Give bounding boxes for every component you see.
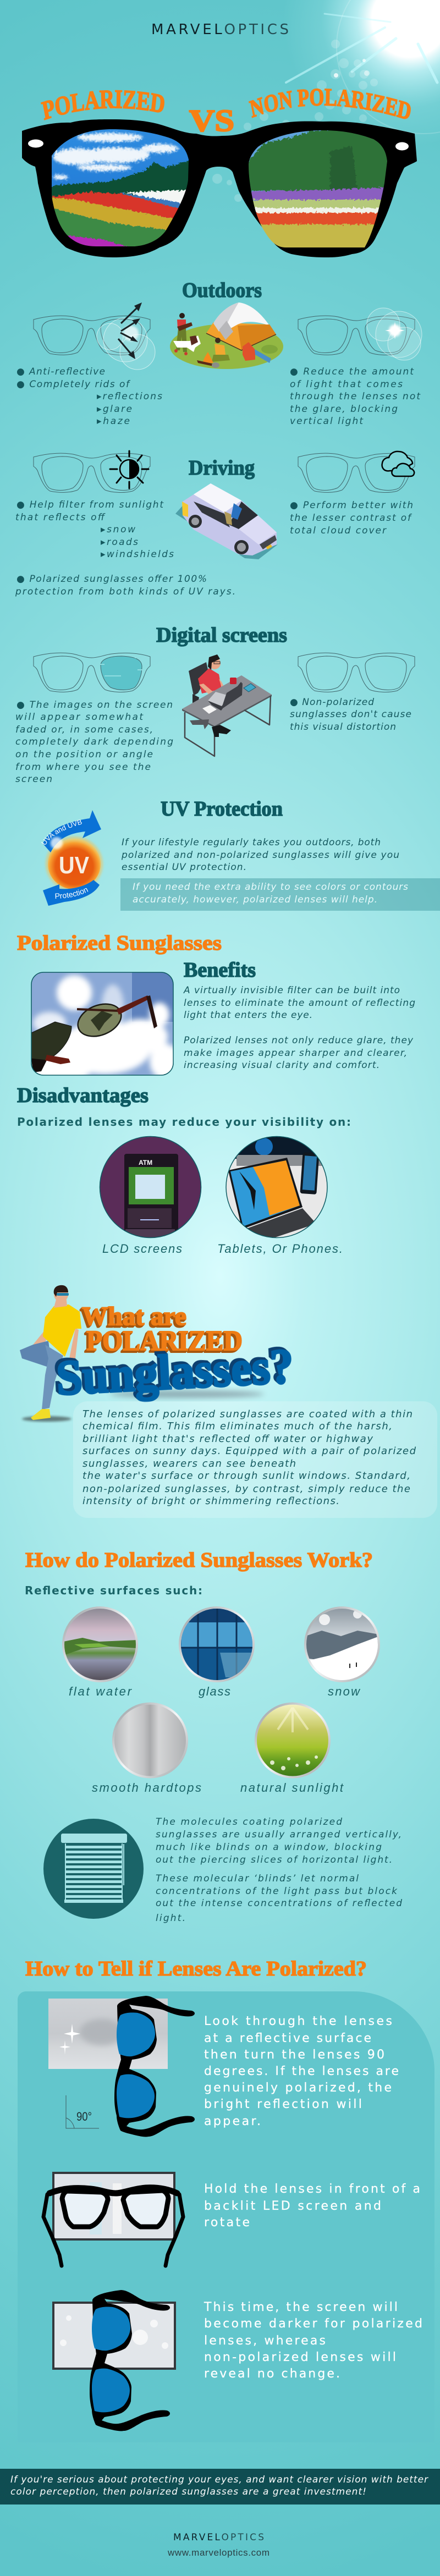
text: non polarized driving	[290, 500, 413, 536]
closing banner: color perception, then polarized sunglasses are a great investment!	[10, 2486, 366, 2497]
text: UV protection note	[15, 574, 235, 597]
icon: window blinds	[43, 1819, 144, 1919]
text: UV protection: If your lifestyle regularly takes you outdoors, both	[122, 837, 381, 848]
photo: ATM LCD screen: ATM	[139, 1159, 152, 1166]
illustration: car	[175, 483, 278, 559]
driving non polarized glasses with cloud icon	[298, 452, 415, 492]
illustration: person at desk	[182, 654, 272, 756]
photo: glass	[179, 1606, 256, 1682]
text: polarized digital screens: on the position or angle	[15, 749, 153, 760]
step 2: backlit screen with glasses	[43, 2173, 183, 2266]
text: UV protection note: protection from both kinds of UV rays.	[15, 586, 235, 597]
step 1: 90 degree icon	[66, 2095, 99, 2128]
seated camper	[212, 338, 230, 362]
heading: Disadvantages: Disadvantages	[17, 1084, 148, 1107]
text: how the molecules work: The molecules coating polarized	[156, 1817, 342, 1828]
step 2: text: Hold the lenses in front of a	[204, 2182, 420, 2196]
text: polarized outdoors: ● Completely rids of	[16, 379, 131, 390]
label: flat water: flat water	[69, 1685, 133, 1698]
title: POLARIZED VS NON POLARIZED: VS	[189, 104, 234, 138]
text: polarized digital screens: completely dark depending	[15, 736, 173, 747]
text: polarized driving: ● Help filter from sunlight	[16, 499, 164, 510]
panel: what are polarized sunglasses text	[73, 1401, 437, 1518]
subheading: reflective surfaces: Reflective surfaces such:	[25, 1584, 202, 1597]
digital polarized glasses with tinted lens	[34, 653, 150, 692]
sun and lens flare	[212, 0, 440, 202]
callout: extra ability: If you need the extra ability to see colors or contours	[133, 882, 408, 893]
panel: what are polarized sunglasses text: brilliant light that's reflected off water or highway	[82, 1433, 373, 1445]
text: polarized outdoors: ● Anti-reflective	[16, 366, 105, 377]
step 3: text: lenses, whereas	[204, 2334, 326, 2348]
text: non polarized outdoors	[290, 366, 421, 427]
panel: what are polarized sunglasses text: surfaces on sunny days. Equipped with a pair of polarized	[82, 1445, 416, 1457]
heading: Outdoors: Outdoors	[182, 279, 262, 302]
text: UV protection	[121, 837, 399, 873]
closing banner: If you're serious about protecting your eyes, and want clearer vision with better	[10, 2474, 428, 2485]
text: how the molecules work: out the intense concentrations of reflected	[156, 1898, 402, 1909]
right lens: non polarized scene	[249, 130, 387, 247]
text: polarized digital screens: will appear somewhat	[15, 712, 144, 723]
heading: Polarized Sunglasses: Polarized Sunglasses	[17, 932, 222, 955]
text: polarized digital screens	[15, 700, 173, 785]
text: how the molecules work: light.	[156, 1913, 185, 1924]
text: polarized digital screens: screen	[15, 774, 52, 785]
step 1: 90 degree icon: 90°	[76, 2110, 92, 2123]
photo: ATM LCD screen	[99, 1136, 204, 1240]
panel: what are polarized sunglasses text: sunglasses, wearers can see beneath	[82, 1458, 296, 1469]
text: UV protection: polarized and non-polarized sunglasses will give you	[121, 850, 399, 861]
panel: what are polarized sunglasses text: chemical film. This film eliminates much of the harsh,	[82, 1421, 392, 1432]
text: how the molecules work: out the piercing slices of horizontal light.	[156, 1854, 392, 1865]
heading: Driving: Driving	[189, 456, 255, 480]
step 3: text: non-polarized lenses will	[204, 2351, 396, 2364]
photo: natural sunlight	[255, 1703, 331, 1779]
step 1: text: bright reflection will	[204, 2098, 362, 2111]
text: polarized outdoors: ▸glare	[97, 404, 132, 415]
label: natural sunlight: natural sunlight	[240, 1781, 344, 1795]
camper with logs	[174, 313, 193, 355]
text: how the molecules work: These molecular ‘blinds’ let normal	[156, 1873, 359, 1884]
step 1: text: at a reflective surface	[204, 2032, 371, 2045]
figure: man in yellow shirt	[20, 1285, 81, 1422]
label: LCD screens: LCD screens	[102, 1242, 182, 1256]
text: how the molecules work: much like blinds on a window, blocking	[156, 1842, 382, 1853]
subheading: visibility: Polarized lenses may reduce your visibility on:	[17, 1115, 351, 1129]
heading: Digital screens: Digital screens	[156, 624, 287, 647]
text: non polarized digital screens: sunglasses don't cause	[290, 709, 411, 720]
left lens: polarized scene	[52, 129, 189, 246]
text: non polarized outdoors: of light that comes	[290, 379, 403, 390]
photo: smooth hardtops	[112, 1703, 188, 1779]
text: non polarized driving: the lesser contrast of	[290, 513, 413, 524]
step 1: text: genuinely polarized, the	[204, 2081, 392, 2095]
outdoors non polarized glasses with sparkle	[298, 308, 422, 360]
outdoors polarized glasses with deflected rays	[34, 302, 155, 370]
step 3: text: become darker for polarized	[204, 2317, 422, 2331]
icon: UV protection badge	[41, 810, 105, 906]
driving polarized glasses with half sun icon	[34, 451, 150, 492]
text: benefits: A virtually invisible filter can be built into	[183, 985, 400, 996]
heading: What are POLARIZED Sunglasses?: Sunglasses?	[55, 1339, 295, 1406]
text: non polarized driving: total cloud cover	[290, 525, 387, 536]
text: polarized outdoors	[16, 366, 162, 427]
text: benefits: make images appear sharper and clearer,	[184, 1048, 407, 1059]
text: non polarized digital screens: ● Non-polarized	[290, 697, 374, 708]
title: POLARIZED VS NON POLARIZED	[41, 88, 411, 138]
illustration: camping scene	[170, 302, 283, 369]
panel: how to tell steps	[18, 1991, 435, 2442]
text: non polarized outdoors: ● Reduce the amount	[290, 366, 414, 377]
backpack and mat	[243, 342, 255, 361]
text: non polarized driving: ● Perform better with	[290, 500, 413, 511]
step 1: text: Look through the lenses	[204, 2014, 392, 2028]
text: polarized outdoors: ▸haze	[97, 416, 130, 427]
step 2: text: backlit LED screen and	[204, 2199, 381, 2213]
text: polarized digital screens: ● The images on the screen	[16, 700, 173, 711]
photo: flat water	[62, 1606, 138, 1682]
text: polarized outdoors: ▸reflections	[97, 391, 162, 402]
step 1: text	[204, 2014, 399, 2128]
step 3: text: This time, the screen will	[204, 2300, 398, 2314]
label: snow: snow	[328, 1685, 361, 1698]
step 1: text: degrees. If the lenses are	[204, 2065, 399, 2078]
callout: extra ability	[120, 878, 440, 911]
heading: What are POLARIZED Sunglasses?	[55, 1302, 295, 1406]
step 1: text: then turn the lenses 90	[204, 2048, 384, 2062]
step 1: text: appear.	[204, 2115, 261, 2128]
panel: what are polarized sunglasses text: non-polarized sunglasses, by contrast, simply reduce the	[82, 1483, 410, 1495]
heading: What are POLARIZED Sunglasses?: POLARIZED	[86, 1325, 243, 1357]
text: polarized driving: that reflects off	[15, 512, 106, 523]
step 2: text: rotate	[204, 2216, 250, 2230]
text: non polarized outdoors: through the lenses not	[290, 391, 421, 402]
text: benefits: increasing visual clarity and comfort.	[184, 1060, 380, 1071]
footer url: www.marveloptics.com	[167, 2547, 270, 2558]
text: non polarized outdoors: the glare, blocking	[290, 404, 398, 415]
panel: what are polarized sunglasses text: the water's surface or through sunlit windows. Standard,	[82, 1470, 410, 1482]
text: UV protection note: ● Polarized sunglasses offer 100%	[16, 574, 207, 585]
text: benefits: Polarized lenses not only reduce glare, they	[184, 1035, 414, 1046]
text: polarized driving: ▸snow	[101, 524, 135, 535]
step 3: screen with rotated glasses	[53, 2290, 175, 2431]
text: benefits	[183, 985, 415, 1071]
step 2: text	[204, 2182, 420, 2230]
text: non polarized outdoors: vertical light	[290, 416, 364, 427]
heading: How to Tell if Lenses Are Polarized?: How to Tell if Lenses Are Polarized?	[25, 1957, 367, 1980]
text: benefits: light that enters the eye.	[184, 1010, 312, 1021]
closing banner	[0, 2469, 440, 2505]
panel: what are polarized sunglasses text: intensity of bright or shimmering reflections.	[82, 1495, 339, 1507]
icon: UV protection badge: Protection	[55, 888, 88, 899]
text: benefits: lenses to eliminate the amount of reflecting	[184, 998, 415, 1009]
icon: UV protection badge: UVA and UVB	[41, 819, 82, 845]
text: how the molecules work	[156, 1817, 402, 1924]
dog	[173, 335, 201, 352]
callout: extra ability: accurately, however, polarized lenses will help.	[133, 894, 377, 905]
label: glass: glass	[199, 1685, 230, 1698]
text: polarized driving: ▸windshields	[101, 549, 174, 560]
icon: UV protection badge: UV	[59, 852, 90, 879]
text: non polarized digital screens	[290, 697, 411, 733]
heading: What are POLARIZED Sunglasses?: What are	[82, 1302, 186, 1331]
heading: Benefits: Benefits	[184, 959, 256, 982]
text: polarized digital screens: faded or, in some cases,	[15, 724, 153, 735]
photo: tablets and phones	[226, 1136, 330, 1243]
text: how the molecules work: sunglasses are usually arranged vertically,	[156, 1829, 402, 1840]
step 3: text	[204, 2300, 422, 2381]
text: UV protection: essential UV protection.	[122, 862, 246, 873]
heading: UV Protection: UV Protection	[161, 797, 283, 821]
step 3: text: reveal no change.	[204, 2367, 340, 2381]
text: polarized driving: ▸roads	[101, 537, 138, 548]
tent	[206, 302, 276, 350]
hero sunglasses with lens scenes	[22, 119, 417, 257]
step 1: reflective surface image	[48, 1999, 168, 2069]
panel: what are polarized sunglasses text: The lenses of polarized sunglasses are coated with a thin	[82, 1408, 413, 1420]
text: polarized driving	[15, 499, 174, 560]
label: smooth hardtops: smooth hardtops	[92, 1781, 201, 1795]
campfire	[202, 352, 213, 363]
step 1: sunglasses turned sideways	[114, 1996, 195, 2137]
title: POLARIZED VS NON POLARIZED: POLARIZED	[41, 90, 164, 120]
heading: How do Polarized Sunglasses Work?: How do Polarized Sunglasses Work?	[25, 1549, 373, 1572]
text: how the molecules work: concentrations of the light pass but block	[156, 1886, 398, 1897]
footer logo: Marvel Optics: MARVELOPTICS	[173, 2532, 264, 2543]
label: Tablets, Or Phones: Tablets, Or Phones.	[217, 1242, 343, 1256]
photo: snow	[304, 1606, 380, 1682]
text: non polarized digital screens: this visual distortion	[290, 722, 396, 733]
logo: Marvel Optics: MARVELOPTICS	[151, 21, 289, 38]
title: POLARIZED VS NON POLARIZED: NON POLARIZED	[249, 88, 411, 119]
photo: sunglasses against clouds	[31, 972, 174, 1076]
text: polarized digital screens: from where you see the	[15, 762, 151, 773]
digital non polarized glasses	[298, 653, 415, 692]
